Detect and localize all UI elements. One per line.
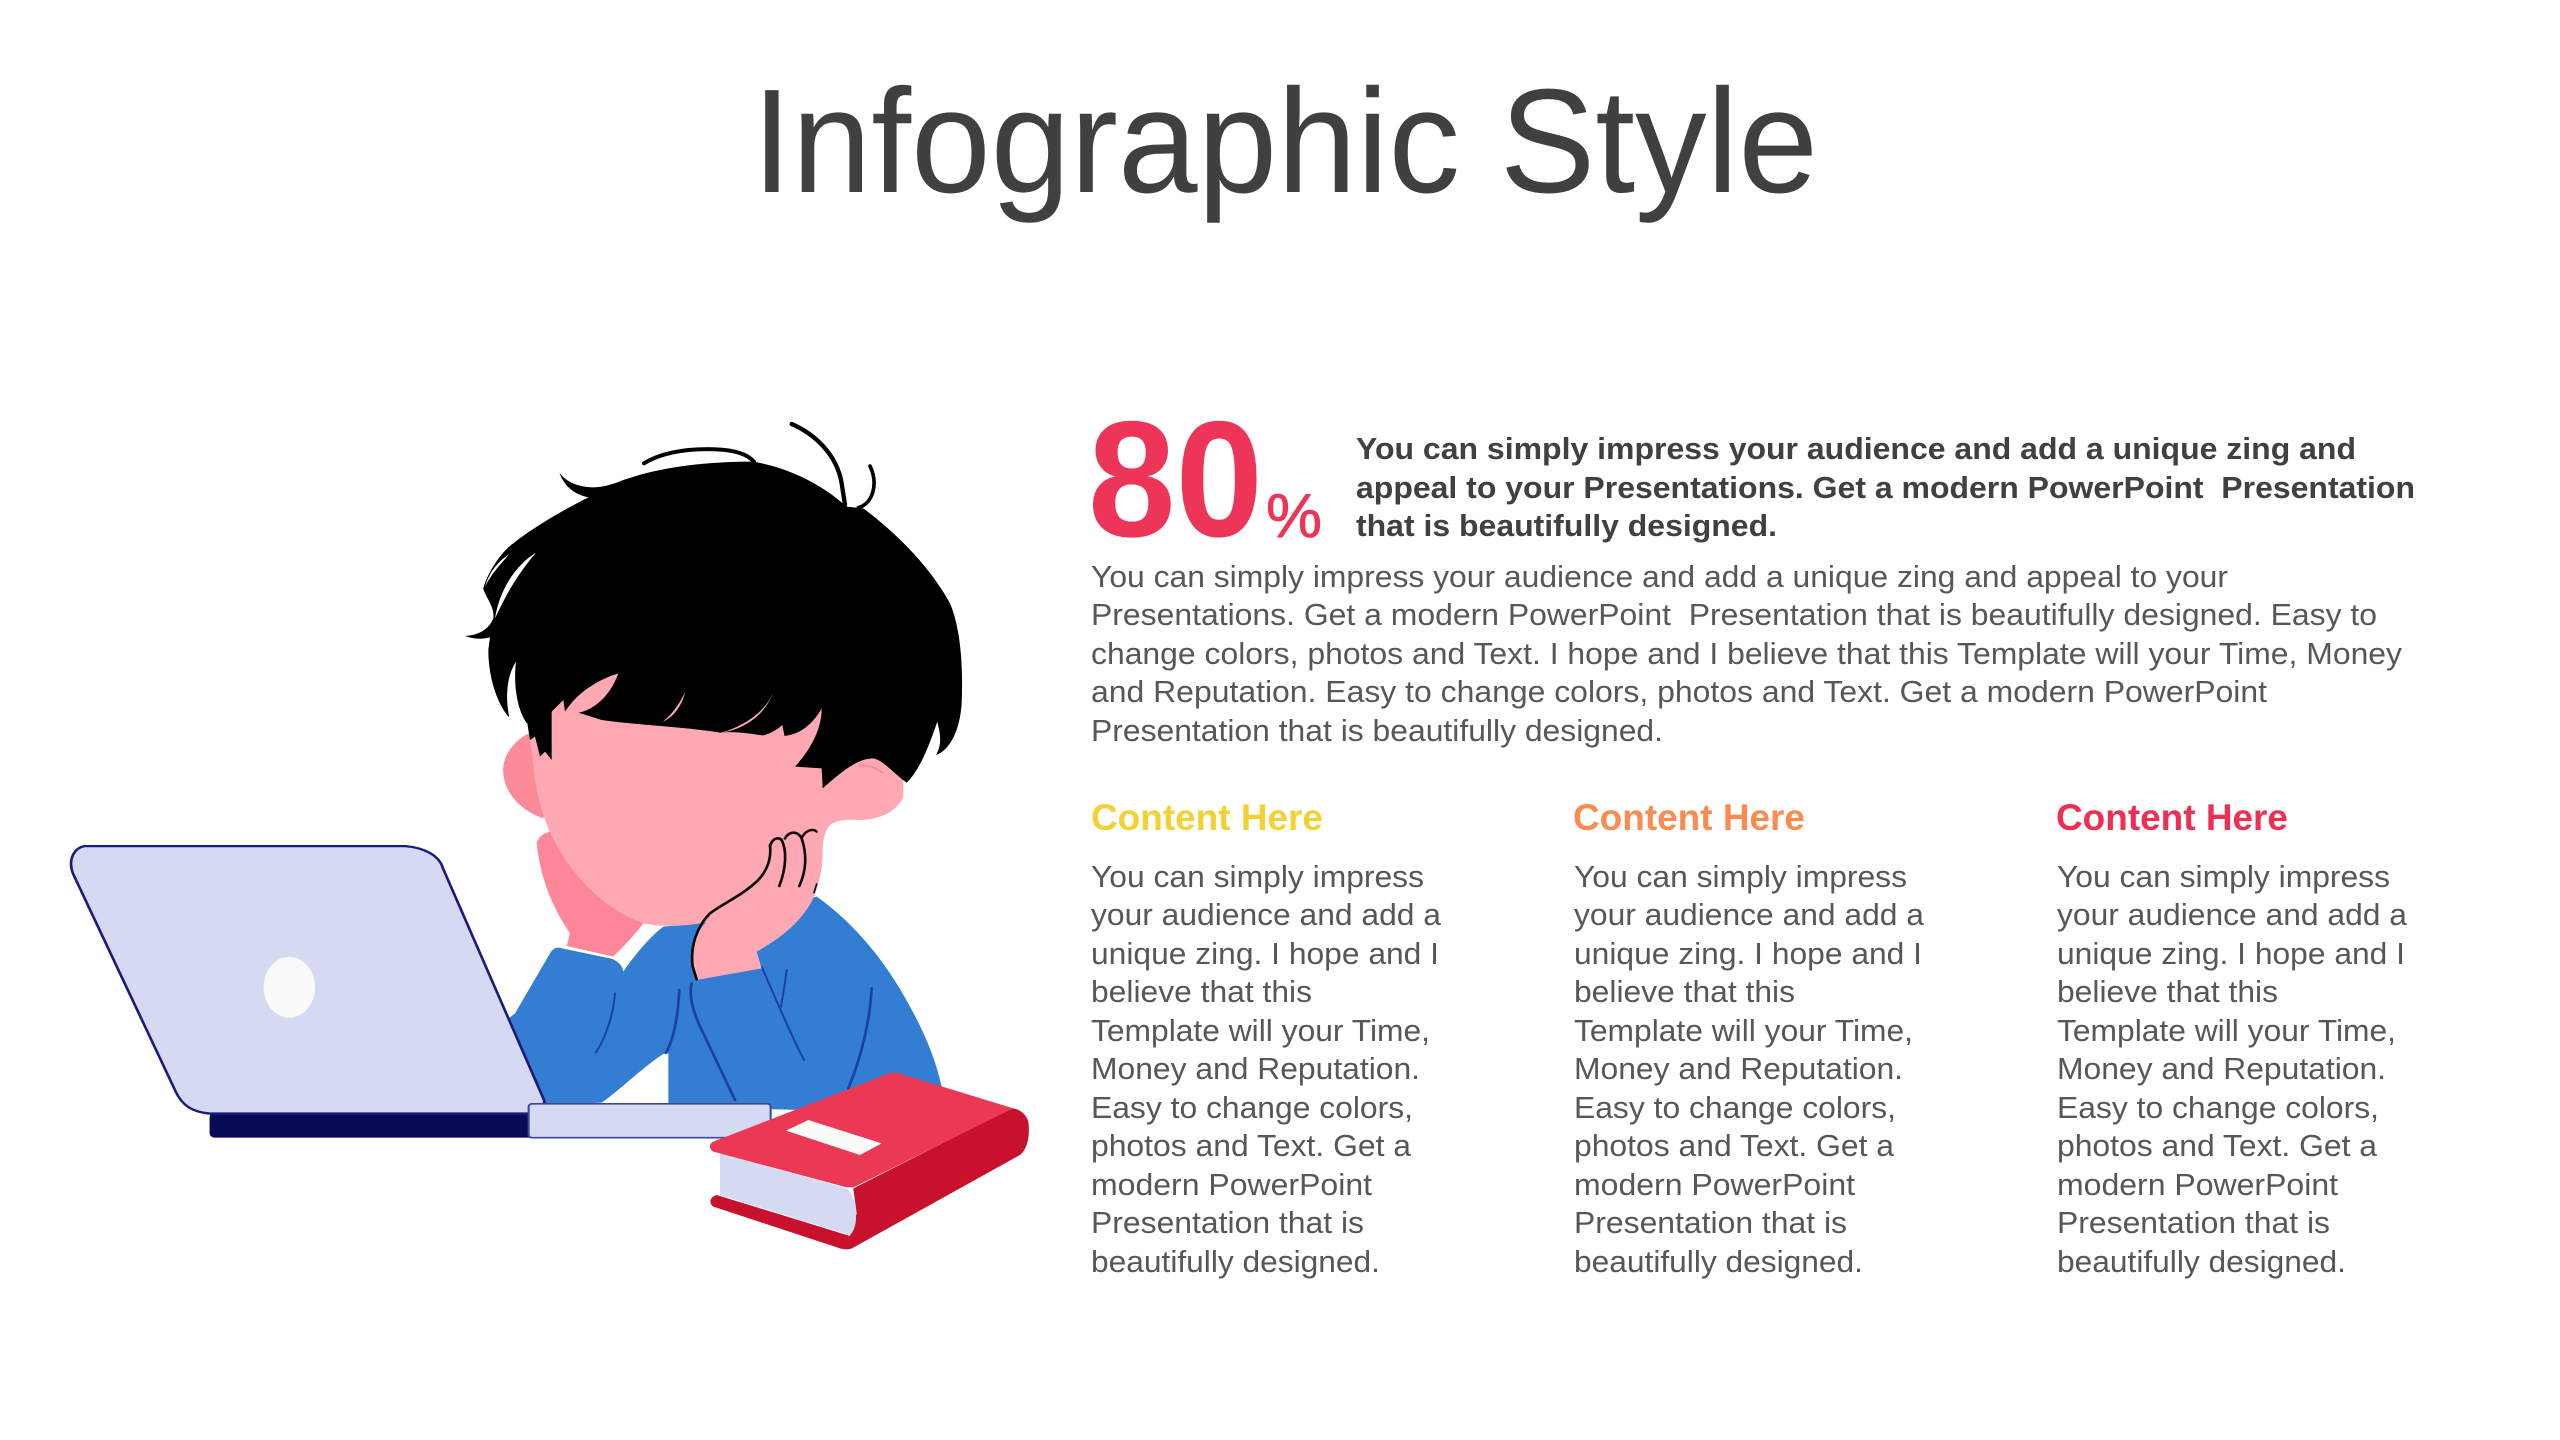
face, ear and right hand [528,663,903,980]
column 3 text: Template will your Time, [2057,1013,2396,1048]
lead text: that is beautifully designed. [1356,508,1777,543]
column 3 text [2057,859,2408,1279]
intro paragraph: change colors, photos and Text. I hope and I believe that this Template will your Time, Money [1091,636,2403,671]
column 1 heading: Content Here [1091,797,1323,838]
big number: 80 [1088,387,1263,571]
column 3 text: Money and Reputation. [2057,1051,2386,1086]
column 3 text: photos and Text. Get a [2057,1128,2378,1163]
column 2 text: beautifully designed. [1574,1244,1863,1279]
column 2 text: Money and Reputation. [1574,1051,1903,1086]
intro paragraph: Presentations. Get a modern PowerPoint Presentation that is beautifully designed. Easy to [1091,597,2377,632]
column 1 text: beautifully designed. [1091,1244,1380,1279]
illustration: boy at laptop with book [71,424,1029,1249]
hand outline and fingers [692,830,817,979]
hair [465,424,962,788]
column 2 text: modern PowerPoint [1574,1167,1855,1202]
column 1 text: your audience and add a [1091,897,1442,932]
intro paragraph [1091,559,2403,748]
laptop lid [71,846,544,1114]
column 1 text: unique zing. I hope and I [1091,936,1439,971]
book [710,1073,1029,1249]
column 2 text: your audience and add a [1574,897,1925,932]
column 3 text: beautifully designed. [2057,1244,2346,1279]
column 2 text: Presentation that is [1574,1205,1847,1240]
column 1 text: believe that this [1091,974,1312,1009]
column 3 text: believe that this [2057,974,2278,1009]
column 1 text: photos and Text. Get a [1091,1128,1412,1163]
column 2 text: unique zing. I hope and I [1574,936,1922,971]
column 1 text: Template will your Time, [1091,1013,1430,1048]
body and arms [503,663,942,1113]
column 2 text: Template will your Time, [1574,1013,1913,1048]
fringe partings [663,692,685,722]
lead text [1356,431,2415,543]
column 1 text [1091,859,1442,1279]
column 3 heading: Content Here [2056,797,2288,838]
column 2 text: Easy to change colors, [1574,1090,1896,1125]
panel: 80 percent statistic [1088,387,2415,571]
hair highlights [495,553,536,618]
sweater [507,897,942,1113]
column 3 text: You can simply impress [2057,859,2390,894]
lead text: appeal to your Presentations. Get a modern PowerPoint Presentation [1356,470,2415,505]
column 3 text: Easy to change colors, [2057,1090,2379,1125]
laptop keyboard deck [529,1104,771,1138]
column 3 text: your audience and add a [2057,897,2408,932]
laptop logo [264,957,315,1018]
panel: column 2 [1573,797,1925,1279]
column 1 text: Easy to change colors, [1091,1090,1413,1125]
intro paragraph: Presentation that is beautifully designed. [1091,713,1663,748]
hair mass [465,462,962,788]
column 1 text: You can simply impress [1091,859,1424,894]
column 2 heading: Content Here [1573,797,1805,838]
column 2 text [1574,859,1925,1279]
boy [465,424,962,1113]
ear highlight [859,765,883,773]
intro paragraph: and Reputation. Easy to change colors, photos and Text. Get a modern PowerPoint [1091,674,2267,709]
panel: column 1 [1091,797,1442,1279]
hair top wisps [644,424,874,508]
book cover [710,1073,1013,1187]
laptop [71,846,771,1138]
book label [786,1120,882,1155]
lead text: You can simply impress your audience and add a unique zing and [1356,431,2356,466]
column 3 text: Presentation that is [2057,1205,2330,1240]
sweater fold lines [596,967,872,1100]
percent sign: % [1266,482,1322,551]
book spine and back cover [710,1108,1029,1249]
title: Infographic Style [752,59,1818,224]
column 3 text: unique zing. I hope and I [2057,936,2405,971]
panel: column 3 [2056,797,2408,1279]
intro paragraph: You can simply impress your audience and add a unique zing and appeal to your [1091,559,2228,594]
column 2 text: photos and Text. Get a [1574,1128,1895,1163]
left hand [537,832,667,957]
column 2 text: believe that this [1574,974,1795,1009]
book pages [720,1153,856,1235]
column 1 text: Money and Reputation. [1091,1051,1420,1086]
column 3 text: modern PowerPoint [2057,1167,2338,1202]
column 2 text: You can simply impress [1574,859,1907,894]
left ear [503,733,553,818]
column 1 text: modern PowerPoint [1091,1167,1372,1202]
laptop base [210,1112,541,1138]
column 1 text: Presentation that is [1091,1205,1364,1240]
